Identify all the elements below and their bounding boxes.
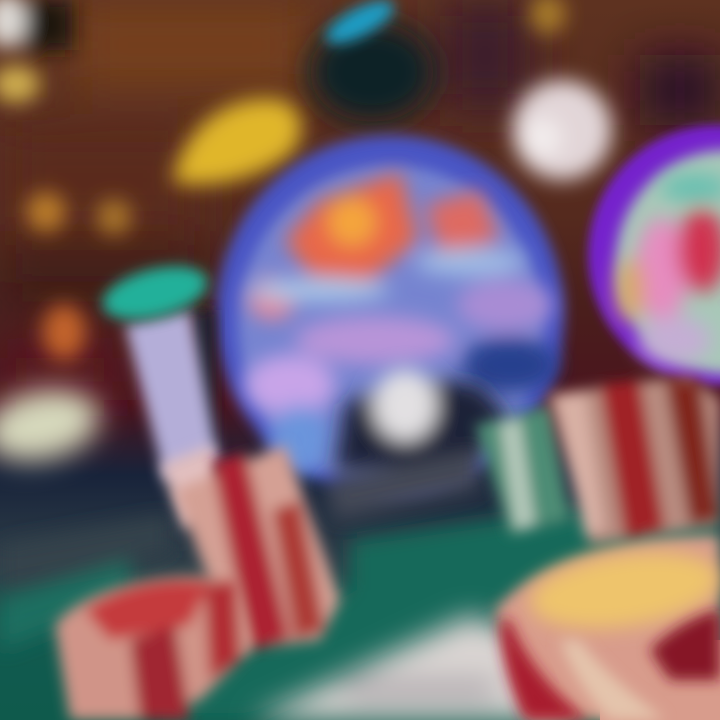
chip stack: bottom left red and white	[55, 576, 250, 720]
chip stack: green and white behind	[475, 405, 570, 535]
chip stack: centre red and white	[175, 445, 340, 650]
icon: wall lights	[26, 192, 132, 360]
panel: dark slot opening with white light	[325, 369, 510, 520]
icon: teal light	[320, 0, 400, 52]
chip stack: right red and white	[548, 375, 720, 545]
icon: amber top light	[530, 0, 566, 34]
icon: left white green glow	[0, 380, 106, 470]
table: white foreground	[250, 615, 570, 720]
icon: yellow ceiling lamp	[172, 99, 302, 185]
icon: top left dark and white lamp	[0, 0, 72, 50]
icon: small yellow lamp left	[0, 65, 40, 103]
icon: dark post left of wheel	[192, 310, 214, 450]
chip stack: foreground right with yellow top	[495, 535, 720, 720]
panel: purple wheel right	[588, 125, 720, 385]
icon: white globe lamp	[512, 80, 612, 180]
chip stack: tall lavender column with teal cap	[97, 257, 225, 530]
dark hood top centre	[310, 22, 434, 122]
background: ceiling tones	[0, 0, 720, 400]
table: green felt band	[0, 500, 720, 720]
panel: blue slot wheel centre	[216, 135, 564, 495]
